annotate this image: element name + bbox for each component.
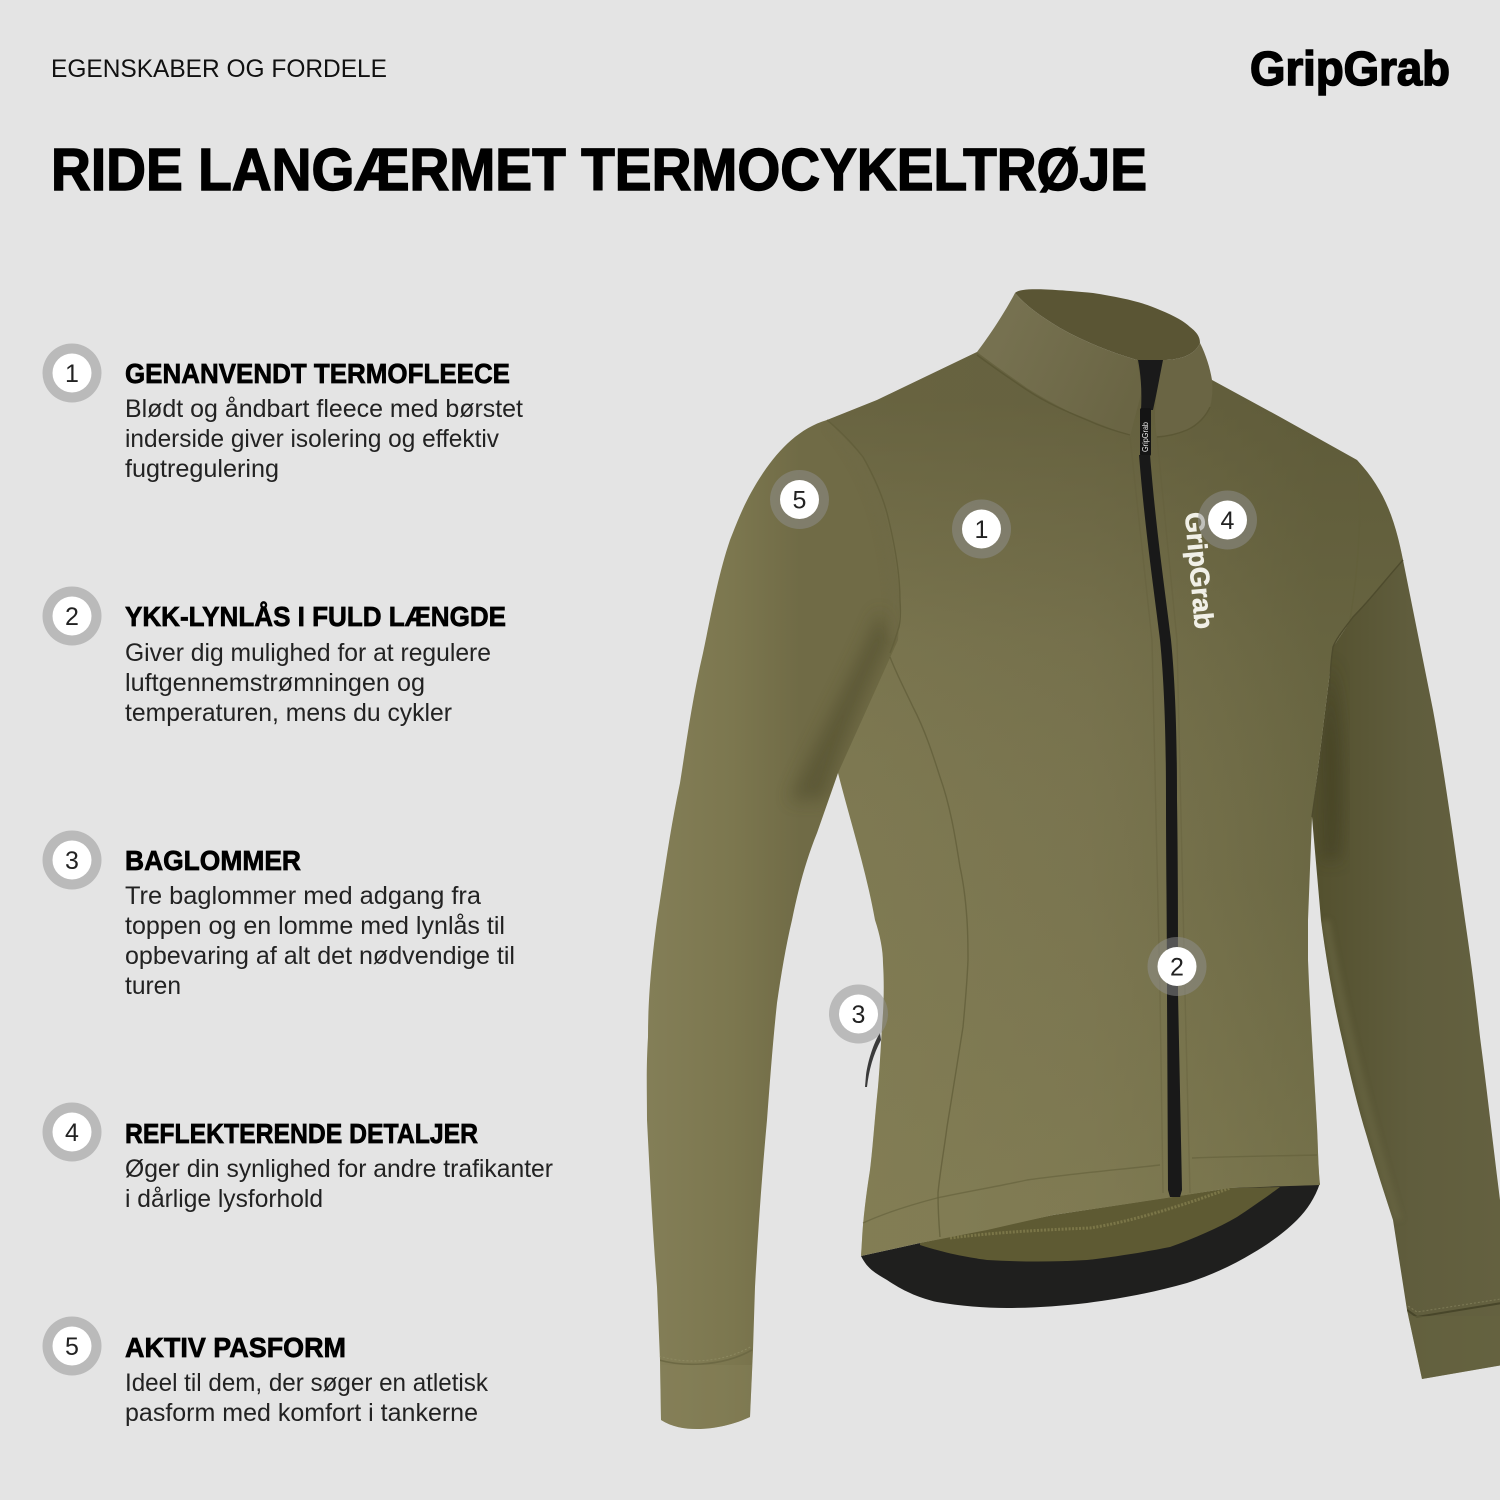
badge 5 <box>42 1316 102 1376</box>
badge 2 <box>42 586 102 646</box>
badge 3 <box>42 830 102 890</box>
description 2 <box>125 639 491 727</box>
hotspot 2 <box>1148 937 1206 996</box>
side pocket zipper <box>865 1033 881 1087</box>
zipper top garage <box>1138 360 1163 410</box>
badge 4: 4 <box>65 1119 79 1147</box>
right sleeve <box>1300 550 1500 1400</box>
description 4 <box>125 1155 553 1213</box>
feature 2: full length YKK zip <box>42 586 506 727</box>
hotspot 3 <box>829 984 888 1044</box>
stitched seams <box>827 420 1403 1237</box>
hotspot 5 <box>770 470 829 529</box>
description 2: Giver dig mulighed for at regulere <box>125 639 491 667</box>
title: RIDE LANGÆRMET TERMOCYKELTRØJE <box>51 137 1147 203</box>
back collar interior <box>1015 289 1200 360</box>
heading 3: BAGLOMMER <box>125 845 301 876</box>
heading 1: GENANVENDT TERMOFLEECE <box>125 358 510 389</box>
description 1: fugtregulering <box>125 455 279 483</box>
description 3: opbevaring af alt det nødvendige til <box>125 942 515 970</box>
chest logo: GripGrab <box>1179 511 1219 630</box>
collar seam <box>977 355 1210 437</box>
description 3: turen <box>125 972 181 1000</box>
feature 5: active fit <box>42 1316 488 1427</box>
description 5 <box>125 1369 488 1427</box>
left sleeve <box>640 410 910 1440</box>
badge 1 <box>42 344 102 402</box>
section label: EGENSKABER OG FORDELE <box>51 55 387 83</box>
hotspot 1: 1 <box>975 516 988 544</box>
hotspot 4: 4 <box>1221 507 1235 535</box>
zipper pull with tag: GripGrab <box>1141 422 1150 452</box>
description 4: i dårlige lysforhold <box>125 1185 323 1213</box>
badge 5: 5 <box>65 1333 79 1361</box>
badge 4 <box>42 1102 102 1162</box>
collar front right <box>1155 343 1212 437</box>
feature 1: recycled thermal fleece <box>42 344 523 483</box>
brand logo: GripGrab <box>1250 43 1450 96</box>
heading 4: REFLEKTERENDE DETALJER <box>125 1118 478 1149</box>
jersey illustration <box>640 289 1500 1440</box>
feature 4: reflective details <box>42 1102 553 1213</box>
back hem stitching <box>950 1188 1230 1238</box>
hotspot 3: 3 <box>852 1001 865 1029</box>
description 3 <box>125 882 515 1000</box>
badge 1: 1 <box>65 360 79 388</box>
zipper pull with tag <box>1140 408 1151 456</box>
description 1 <box>125 395 523 483</box>
hotspot 4 <box>1198 490 1257 550</box>
description 1: inderside giver isolering og effektiv <box>125 425 499 453</box>
description 4: Øger din synlighed for andre trafikanter <box>125 1155 553 1183</box>
collar front left <box>977 293 1142 436</box>
hotspot 5: 5 <box>793 486 806 514</box>
description 5: pasform med komfort i tankerne <box>125 1399 478 1427</box>
heading 5: AKTIV PASFORM <box>125 1332 346 1363</box>
badge 2: 2 <box>65 603 79 631</box>
description 2: temperaturen, mens du cykler <box>125 699 452 727</box>
hem back panel <box>920 1187 1280 1262</box>
hotspot 1 <box>952 500 1011 558</box>
description 3: toppen og en lomme med lynlås til <box>125 912 505 940</box>
description 5: Ideel til dem, der søger en atletisk <box>125 1369 488 1397</box>
badge 3: 3 <box>65 847 79 875</box>
torso <box>827 352 1403 1256</box>
description 3: Tre baglommer med adgang fra <box>125 882 481 910</box>
description 1: Blødt og åndbart fleece med børstet <box>125 395 523 423</box>
zipper <box>1139 455 1182 1197</box>
description 2: luftgennemstrømningen og <box>125 669 425 697</box>
hotspot 2: 2 <box>1170 954 1184 982</box>
feature 3: back pockets <box>42 830 515 1000</box>
hem inner lining <box>861 1183 1320 1308</box>
feature list <box>42 344 553 1427</box>
heading 2: YKK-LYNLÅS I FULD LÆNGDE <box>125 601 506 632</box>
